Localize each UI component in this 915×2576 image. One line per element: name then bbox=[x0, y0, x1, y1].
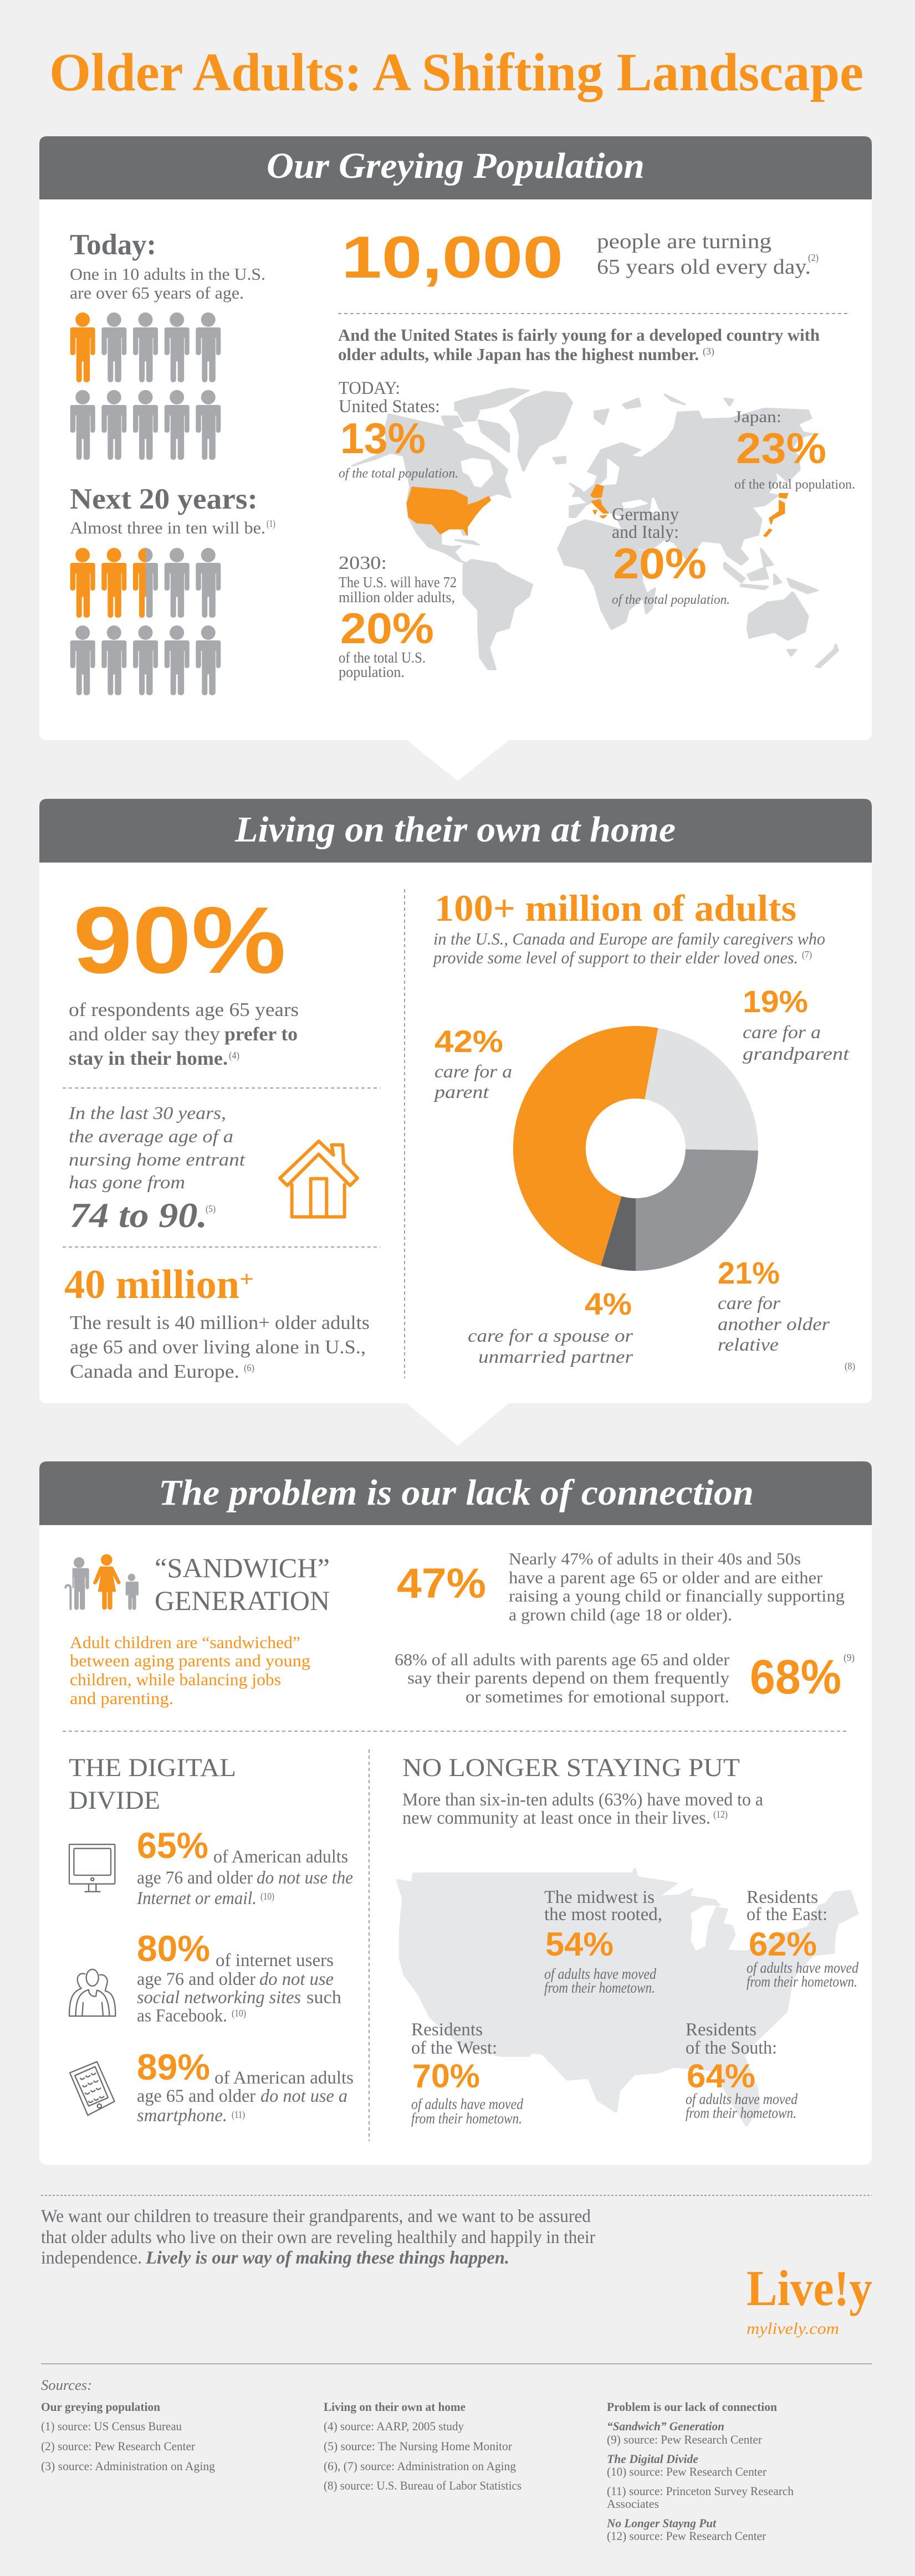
text: US young for developed country: And the United States is fairly young for a developed country with bbox=[338, 325, 820, 345]
text: closing statement: independence. bbox=[41, 2248, 142, 2268]
stat: 80% no social networking: (10) bbox=[232, 2008, 246, 2019]
stat: 10,000 people: (2) bbox=[808, 252, 819, 264]
heading: no longer staying put: (12) bbox=[713, 1809, 728, 1820]
stat: 47%: a grown child (age 18 or older). bbox=[509, 1605, 732, 1624]
label: 42% parent: 42% bbox=[435, 1024, 503, 1059]
text: adult children sandwiched: between aging parents and young bbox=[70, 1651, 310, 1670]
text: nursing home entrant age: In the last 30 years, bbox=[68, 1104, 226, 1123]
stat: 100+ million caregivers: in the U.S., Canada and Europe are family caregivers who bbox=[433, 929, 825, 948]
stat: 40 million: 40 million bbox=[64, 1262, 239, 1307]
label: 4% spouse or partner: care for a spouse or bbox=[468, 1326, 633, 1346]
sources column 3: Associates bbox=[607, 2497, 659, 2511]
label: west 70%: of adults have moved bbox=[411, 2096, 523, 2112]
text: adult children sandwiched: children, while balancing jobs bbox=[70, 1670, 281, 1689]
stat: 90% prefer to stay home: stay in their home. bbox=[69, 1048, 228, 1069]
icon: smartphone bbox=[70, 2062, 115, 2115]
sources column 3: (12) source: Pew Research Center bbox=[607, 2529, 766, 2543]
label: east 62%: 62% bbox=[749, 1926, 817, 1963]
sources column 3: Problem is our lack of connection bbox=[607, 2400, 777, 2414]
chart: US map bbox=[397, 1869, 857, 2126]
stat: 100+ million caregivers: provide some level of support to their elder loved ones. bbox=[432, 948, 798, 967]
label: today United States 13%: TODAY: bbox=[339, 378, 400, 398]
text: closing statement: Lively is our way of making these things happen. bbox=[145, 2248, 509, 2268]
stat: 65% do not use internet: do not use the bbox=[257, 1868, 353, 1888]
label: 2030 20%: 20% bbox=[340, 604, 434, 653]
heading: the digital divide: THE DIGITAL bbox=[69, 1753, 236, 1782]
sources column 2: (8) source: U.S. Bureau of Labor Statistics bbox=[324, 2478, 522, 2492]
stat: 68% bbox=[395, 1650, 855, 1706]
panel: lack of connection bbox=[39, 1461, 872, 2165]
label: south 64%: of adults have moved bbox=[686, 2091, 798, 2107]
heading: no longer staying put bbox=[402, 1753, 763, 1828]
logo: Lively: mylively.com bbox=[747, 2320, 839, 2338]
text: nursing home entrant age: has gone from bbox=[69, 1173, 185, 1193]
stat: 65% do not use internet: Internet or email. bbox=[136, 1889, 257, 1908]
heading: the problem is our lack of connection bbox=[39, 1461, 872, 1525]
stat: 80% no social networking: social networking sites bbox=[137, 1988, 301, 2008]
heading: living on their own at home bbox=[39, 799, 872, 863]
label: west 70%: 70% bbox=[412, 2057, 480, 2095]
stat: 90% prefer to stay home: prefer to bbox=[224, 1023, 298, 1045]
sources column 1 bbox=[41, 2400, 215, 2473]
heading: sandwich generation: “SANDWICH” bbox=[155, 1552, 330, 1583]
label: 42% parent: parent bbox=[433, 1082, 489, 1102]
logo: Lively: Live!y bbox=[747, 2260, 872, 2316]
sources heading: Sources: bbox=[41, 2377, 92, 2393]
heading: the problem is our lack of connection: The problem is our lack of connection bbox=[159, 1472, 754, 1513]
label: midwest 54%: from their hometown. bbox=[544, 1979, 655, 1996]
label: 42% parent bbox=[433, 1024, 512, 1102]
sources column 3: No Longer Stayng Put bbox=[606, 2516, 717, 2530]
title: Older Adults: A Shifting Landscape bbox=[49, 43, 863, 102]
heading: sandwich generation: GENERATION bbox=[155, 1585, 330, 1616]
stat: 80% no social networking: of internet users bbox=[216, 1951, 334, 1971]
stat: 100+ million caregivers bbox=[432, 887, 825, 967]
sources column 2: (6), (7) source: Administration on Aging bbox=[324, 2459, 516, 2473]
stat: 80% no social networking: as Facebook. bbox=[137, 2006, 227, 2026]
label: 21% another relative: another older bbox=[718, 1315, 830, 1335]
sources column 2 bbox=[324, 2400, 522, 2492]
text: nursing home entrant age: 74 to 90. bbox=[70, 1195, 207, 1235]
label: south 64% bbox=[686, 2020, 798, 2121]
text: nursing home entrant age bbox=[68, 1104, 246, 1235]
text: next 20 years bbox=[70, 483, 275, 537]
heading: our greying population bbox=[39, 136, 872, 199]
stat: 47%: 47% bbox=[397, 1560, 486, 1607]
label: 19% grandparent: care for a bbox=[743, 1023, 821, 1043]
stat: 65% do not use internet bbox=[136, 1825, 353, 1908]
label: 2030 20%: million older adults, bbox=[339, 589, 455, 605]
label: Japan 23%: Japan: bbox=[734, 408, 781, 426]
text: next 20 years: (1) bbox=[267, 518, 275, 530]
stat: 40 million: (6) bbox=[244, 1362, 254, 1374]
text: today bbox=[70, 229, 265, 302]
heading: no longer staying put: NO LONGER STAYING PUT bbox=[402, 1753, 740, 1782]
stat: 80% no social networking: such bbox=[306, 1988, 342, 2008]
stat: 47%: have a parent age 65 or older and are either bbox=[509, 1568, 823, 1587]
label: midwest 54%: The midwest is bbox=[544, 1887, 655, 1907]
text: today: are over 65 years of age. bbox=[70, 283, 244, 302]
text: US young for developed country: older adults, while Japan has the highest number. bbox=[338, 345, 699, 364]
label: east 62%: from their hometown. bbox=[747, 1973, 857, 1990]
stat: 90% prefer to stay home: of respondents age 65 years bbox=[69, 999, 299, 1020]
stat: 90% prefer to stay home: and older say they bbox=[69, 1023, 221, 1045]
label: south 64%: Residents bbox=[686, 2020, 756, 2040]
label: 19% grandparent: grandparent bbox=[743, 1044, 850, 1064]
stat: 65% do not use internet: (10) bbox=[260, 1891, 274, 1902]
stat: 65% do not use internet: of American adults bbox=[213, 1847, 348, 1867]
chart: world map bbox=[352, 388, 837, 670]
label: today United States 13% bbox=[339, 378, 458, 481]
sources column 3: (9) source: Pew Research Center bbox=[607, 2433, 763, 2446]
sources column 3: The Digital Divide bbox=[607, 2452, 698, 2466]
stat: 90% prefer to stay home: 90% bbox=[73, 887, 286, 993]
label: west 70% bbox=[411, 2020, 523, 2127]
stat: 65% do not use internet: 65% bbox=[137, 1825, 208, 1866]
stat: 68%: 68% bbox=[750, 1650, 841, 1704]
label: midwest 54%: 54% bbox=[545, 1926, 614, 1963]
heading: the digital divide bbox=[69, 1753, 236, 1815]
stat: 89% no smartphone bbox=[137, 2046, 354, 2126]
sources column 1: Our greying population bbox=[41, 2400, 160, 2414]
icon: monitor bbox=[69, 1844, 115, 1892]
panel: living on their own at home bbox=[39, 799, 872, 1446]
text: US young for developed country bbox=[338, 325, 820, 364]
stat: 89% no smartphone: do not use a bbox=[260, 2086, 347, 2106]
sources column 3: (10) source: Pew Research Center bbox=[607, 2465, 767, 2478]
heading: living on their own at home: Living on their own at home bbox=[234, 809, 676, 850]
icon: group of people bbox=[69, 1969, 115, 2016]
label: Japan 23%: 23% bbox=[736, 424, 826, 473]
stat: 89% no smartphone: smartphone. bbox=[137, 2106, 227, 2126]
label: 2030 20%: population. bbox=[339, 664, 405, 680]
icon: ten people, three highlighted bbox=[70, 548, 221, 695]
icon: house bbox=[280, 1141, 357, 1217]
label: 21% another relative: relative bbox=[718, 1335, 779, 1355]
text: adult children sandwiched bbox=[70, 1633, 310, 1708]
heading: sandwich generation bbox=[155, 1552, 330, 1616]
heading: the digital divide: DIVIDE bbox=[69, 1786, 160, 1815]
label: Japan 23% bbox=[734, 408, 855, 492]
label: 21% another relative: care for bbox=[718, 1294, 780, 1313]
label: 2030 20%: 2030: bbox=[339, 553, 387, 573]
label: 4% spouse or partner bbox=[468, 1286, 633, 1367]
label: west 70%: Residents bbox=[411, 2020, 483, 2040]
label: Germany and Italy 20%: of the total population. bbox=[612, 593, 730, 607]
label: midwest 54% bbox=[544, 1887, 662, 1996]
stat: 40 million bbox=[64, 1262, 370, 1382]
label: south 64%: of the South: bbox=[686, 2038, 777, 2058]
panel: our greying population bbox=[39, 136, 872, 781]
stat: 68%: (9) bbox=[844, 1652, 855, 1664]
text: today: Today: bbox=[70, 229, 156, 261]
stat: 89% no smartphone: (11) bbox=[232, 2109, 245, 2121]
stat: 68%: 68% of all adults with parents age 65 and older bbox=[395, 1650, 730, 1669]
label: 4% spouse or partner: unmarried partner bbox=[478, 1347, 633, 1367]
text: adult children sandwiched: and parenting. bbox=[70, 1689, 173, 1708]
stat: 10,000 people bbox=[341, 224, 819, 290]
stat: 90% prefer to stay home: (4) bbox=[229, 1050, 239, 1061]
stat: 80% no social networking: do not use bbox=[259, 1969, 334, 1989]
label: Germany and Italy 20%: and Italy: bbox=[612, 522, 679, 542]
text: closing statement: We want our children to treasure their grandparents, and we want to be assured bbox=[41, 2206, 591, 2226]
label: today United States 13%: of the total population. bbox=[339, 466, 458, 481]
stat: 100+ million caregivers: (7) bbox=[802, 949, 812, 961]
sources column 2: Living on their own at home bbox=[324, 2400, 466, 2414]
text: adult children sandwiched: Adult children are “sandwiched” bbox=[70, 1633, 300, 1652]
stat: 40 million: The result is 40 million+ older adults bbox=[70, 1312, 370, 1333]
sources column 3: “Sandwich” Generation bbox=[607, 2419, 724, 2433]
stat: 89% no smartphone: 89% bbox=[137, 2046, 210, 2087]
label: today United States 13%: 13% bbox=[340, 414, 426, 463]
sources column 1: (2) source: Pew Research Center bbox=[41, 2439, 196, 2453]
label: east 62%: of adults have moved bbox=[747, 1959, 858, 1976]
stat: 47%: raising a young child or financially supporting bbox=[509, 1586, 845, 1605]
sources column 2: (4) source: AARP, 2005 study bbox=[324, 2419, 464, 2433]
sources column 1: (3) source: Administration on Aging bbox=[41, 2459, 215, 2473]
label: Germany and Italy 20% bbox=[612, 505, 730, 607]
label: Japan 23%: of the total population. bbox=[734, 478, 855, 492]
label: east 62% bbox=[747, 1887, 858, 1990]
sources bbox=[41, 2377, 794, 2543]
label: 2030 20% bbox=[339, 553, 457, 680]
label: 21% another relative bbox=[718, 1255, 855, 1372]
heading: no longer staying put: new community at least once in their lives. bbox=[402, 1808, 710, 1828]
label: 19% grandparent: 19% bbox=[743, 984, 808, 1019]
stat: 40 million: Canada and Europe. bbox=[70, 1361, 239, 1382]
stat: 10,000 people: 65 years old every day. bbox=[597, 255, 811, 279]
stat: 89% no smartphone: of American adults bbox=[214, 2068, 354, 2088]
stat: 80% no social networking: age 76 and older bbox=[137, 1969, 255, 1989]
stat: 89% no smartphone: age 65 and older bbox=[137, 2086, 255, 2106]
label: today United States 13%: United States: bbox=[339, 397, 440, 417]
stat: 10,000 people: people are turning bbox=[597, 230, 771, 253]
text: closing statement bbox=[41, 2206, 595, 2268]
stat: 68%: say their parents depend on them frequently bbox=[407, 1668, 730, 1687]
logo: Lively bbox=[747, 2260, 872, 2338]
stat: 10,000 people: 10,000 bbox=[341, 224, 563, 290]
chart: caregiver donut bbox=[513, 1026, 758, 1271]
stat: 100+ million caregivers: 100+ million of adults bbox=[435, 887, 796, 929]
stat: 40 million: + bbox=[239, 1266, 254, 1291]
stat: 65% do not use internet: age 76 and older bbox=[137, 1868, 253, 1888]
stat: 47%: Nearly 47% of adults in their 40s and 50s bbox=[509, 1549, 801, 1568]
stat: 68%: or sometimes for emotional support. bbox=[466, 1687, 729, 1706]
stat: 80% no social networking: 80% bbox=[137, 1928, 210, 1969]
label: 19% grandparent bbox=[743, 984, 850, 1064]
label: 2030 20%: The U.S. will have 72 bbox=[339, 574, 457, 591]
label: midwest 54%: the most rooted, bbox=[544, 1905, 662, 1925]
stat: 90% prefer to stay home bbox=[69, 887, 299, 1069]
text: today: One in 10 adults in the U.S. bbox=[70, 264, 265, 284]
sources column 3: (11) source: Princeton Survey Research bbox=[607, 2484, 794, 2498]
label: 2030 20%: of the total U.S. bbox=[339, 649, 426, 666]
sources column 3 bbox=[606, 2400, 794, 2543]
label: south 64%: 64% bbox=[687, 2057, 755, 2095]
heading: no longer staying put: More than six-in-ten adults (63%) have moved to a bbox=[402, 1790, 763, 1810]
label: east 62%: of the East: bbox=[747, 1905, 827, 1925]
stat: 80% no social networking bbox=[137, 1928, 342, 2026]
label: south 64%: from their hometown. bbox=[686, 2105, 796, 2121]
text: US young for developed country: (3) bbox=[703, 346, 714, 357]
stat: 40 million: age 65 and over living alone in U.S., bbox=[70, 1336, 366, 1358]
text: next 20 years: Almost three in ten will be. bbox=[70, 518, 265, 537]
label: east 62%: Residents bbox=[747, 1887, 818, 1907]
label: 21% another relative: (8) bbox=[845, 1361, 855, 1372]
text: nursing home entrant age: (5) bbox=[206, 1203, 216, 1215]
sources column 2: (5) source: The Nursing Home Monitor bbox=[324, 2439, 513, 2453]
label: 21% another relative: 21% bbox=[718, 1255, 780, 1290]
text: next 20 years: Next 20 years: bbox=[70, 483, 258, 515]
label: Germany and Italy 20%: 20% bbox=[613, 539, 707, 588]
sources column 1: (1) source: US Census Bureau bbox=[41, 2419, 182, 2433]
label: west 70%: from their hometown. bbox=[411, 2110, 522, 2127]
stat: 47% bbox=[397, 1549, 845, 1624]
icon: ten people, one highlighted bbox=[70, 312, 221, 460]
text: nursing home entrant age: the average age of a bbox=[69, 1127, 233, 1147]
label: Germany and Italy 20%: Germany bbox=[612, 505, 679, 525]
text: nursing home entrant age: nursing home entrant bbox=[69, 1150, 246, 1170]
label: 4% spouse or partner: 4% bbox=[585, 1286, 632, 1321]
heading: our greying population: Our Greying Population bbox=[267, 146, 645, 186]
label: midwest 54%: of adults have moved bbox=[544, 1966, 656, 1982]
label: west 70%: of the West: bbox=[411, 2038, 497, 2058]
label: 42% parent: care for a bbox=[435, 1062, 512, 1082]
icon: three generations family bbox=[65, 1554, 139, 1610]
text: closing statement: that older adults who live on their own are reveling healthily and happily in their bbox=[41, 2228, 595, 2247]
